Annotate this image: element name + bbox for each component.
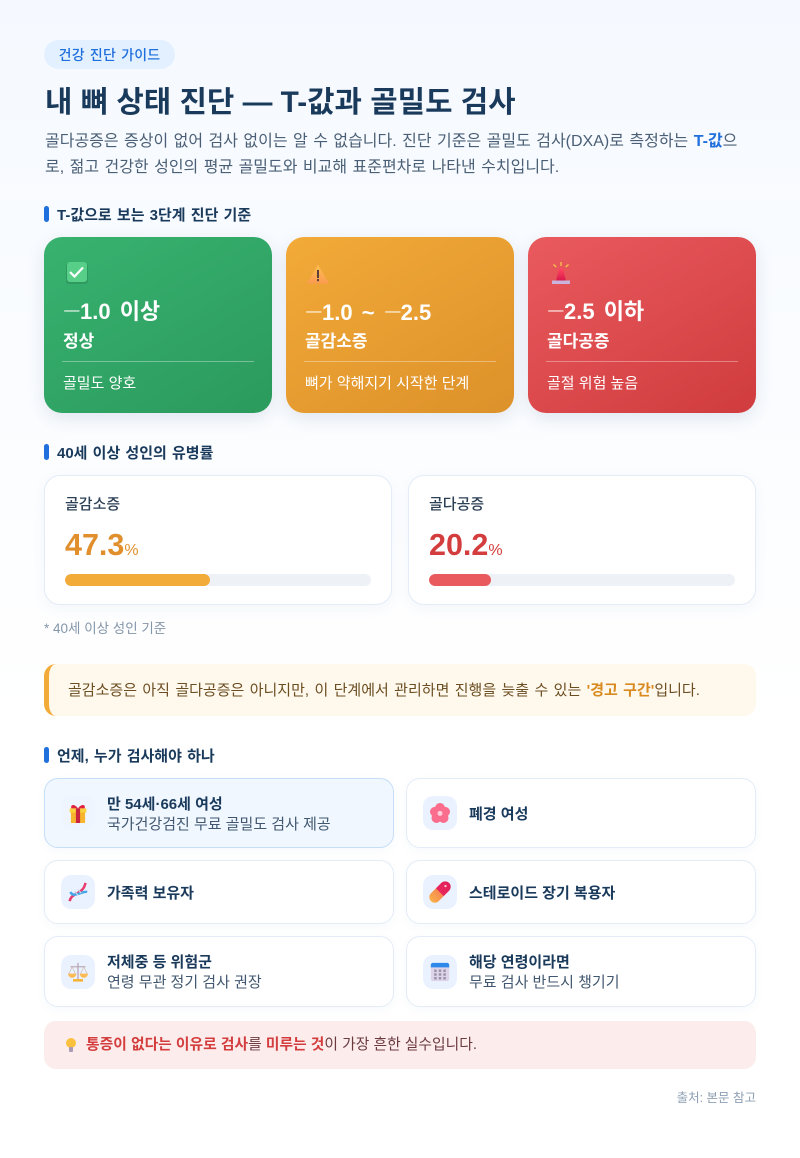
panel: osteopenia card bbox=[286, 237, 514, 413]
stat value: 47.3% bbox=[65, 528, 139, 562]
value: 1.0 ~ 2.5 bbox=[322, 300, 431, 325]
value: − bbox=[63, 294, 81, 326]
description: 골절 위험 높음 bbox=[547, 375, 638, 392]
panel: steroid users bbox=[406, 860, 756, 924]
progress bar bbox=[429, 574, 735, 586]
panel: menopausal women bbox=[406, 778, 756, 848]
panel: osteoporosis card bbox=[528, 237, 756, 413]
item title: 저체중 등 위험군 bbox=[107, 954, 212, 971]
callout: warning zone: 골감소증은 아직 골다공증은 아니지만, 이 단계에서 관리하면 진행을 늦출 수 있는 '경고 구간'입니다. bbox=[68, 682, 700, 699]
description: 뼈가 약해지기 시작한 단계 bbox=[305, 375, 469, 392]
heading: who should test: 언제, 누가 검사해야 하나 bbox=[57, 748, 215, 765]
item detail: 국가건강검진 무료 골밀도 검사 제공 bbox=[107, 816, 331, 833]
value: 2.5 이하 bbox=[564, 299, 644, 324]
progress bar bbox=[65, 574, 371, 586]
heading: diagnosis criteria: T-값으로 보는 3단계 진단 기준 bbox=[57, 207, 251, 224]
badge: guide label bbox=[44, 40, 175, 69]
icon: check mark bbox=[66, 262, 88, 284]
icon: pill bbox=[423, 875, 457, 909]
panel: osteoporosis prevalence bbox=[408, 475, 756, 605]
value: − bbox=[305, 295, 323, 327]
item title: 스테로이드 장기 복용자 bbox=[469, 885, 615, 902]
item detail: 연령 무관 정기 검사 권장 bbox=[107, 974, 262, 991]
icon: calendar bbox=[423, 955, 457, 989]
source note: 출처: 본문 참고 bbox=[677, 1091, 756, 1105]
callout: common mistake bbox=[44, 1021, 756, 1069]
icon: light bulb bbox=[66, 1038, 76, 1052]
stat label: 골다공증 bbox=[429, 496, 484, 513]
value bbox=[305, 295, 431, 327]
label: 골감소증 bbox=[305, 332, 368, 351]
item title: 해당 연령이라면 bbox=[469, 954, 570, 971]
item detail: 무료 검사 반드시 챙기기 bbox=[469, 974, 620, 991]
stat label: 골감소증 bbox=[65, 496, 120, 513]
panel: osteopenia prevalence bbox=[44, 475, 392, 605]
intro text bbox=[45, 132, 737, 176]
intro text: 로, 젊고 건강한 성인의 평균 골밀도와 비교해 표준편차로 나타낸 수치입니다. bbox=[45, 159, 559, 176]
callout: common mistake: 통증이 없다는 이유로 검사를 미루는 것이 가장 흔한 실수입니다. bbox=[86, 1037, 477, 1053]
panel: eligible age bbox=[406, 936, 756, 1007]
label: 골다공증 bbox=[547, 332, 610, 351]
stat value: 20.2% bbox=[429, 528, 503, 562]
value: 1.0 이상 bbox=[80, 299, 160, 324]
heading: prevalence: 40세 이상 성인의 유병률 bbox=[57, 445, 213, 462]
item title: 가족력 보유자 bbox=[107, 885, 194, 902]
badge: guide label: 건강 진단 가이드 bbox=[59, 47, 160, 63]
icon: warning bbox=[307, 265, 329, 284]
panel: family history bbox=[44, 860, 394, 924]
callout: warning zone bbox=[44, 664, 756, 716]
icon: flower bbox=[423, 796, 457, 830]
label: 정상 bbox=[63, 332, 94, 351]
panel: low weight risk group bbox=[44, 936, 394, 1007]
icon: scales bbox=[61, 955, 95, 989]
value: − bbox=[547, 294, 565, 326]
value bbox=[63, 294, 160, 326]
icon: siren bbox=[552, 262, 570, 284]
item title: 폐경 여성 bbox=[469, 806, 528, 823]
icon: dna bbox=[61, 875, 95, 909]
footnote: * 40세 이상 성인 기준 bbox=[44, 621, 166, 636]
panel: women 54-66 bbox=[44, 778, 394, 848]
panel: normal card bbox=[44, 237, 272, 413]
description: 골밀도 양호 bbox=[63, 375, 136, 392]
value bbox=[547, 294, 644, 326]
icon: gift bbox=[61, 796, 95, 830]
title: 내 뼈 상태 진단 — T-값과 골밀도 검사 bbox=[45, 86, 516, 119]
intro text: 골다공증은 증상이 없어 검사 없이는 알 수 없습니다. 진단 기준은 골밀도 검사(DXA)로 측정하는 T-값으 bbox=[45, 133, 737, 150]
value: − bbox=[384, 295, 401, 327]
item title: 만 54세·66세 여성 bbox=[107, 796, 223, 813]
